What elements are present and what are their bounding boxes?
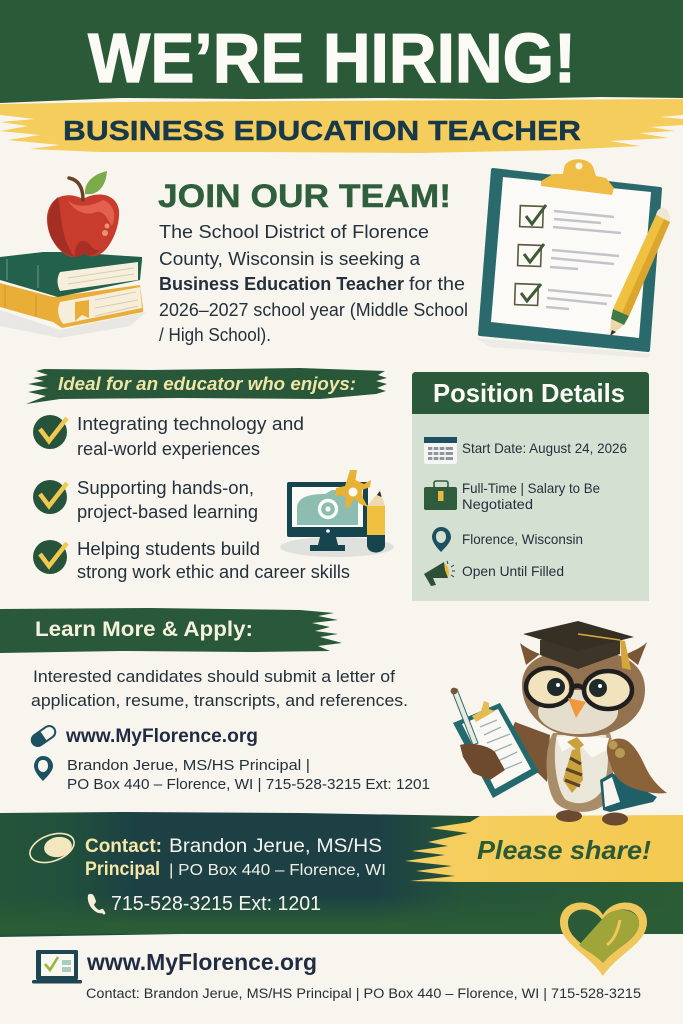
icon: heart	[560, 903, 647, 976]
application instructions: Interested candidates should submit a letter of	[33, 668, 395, 686]
share text: Please share!	[477, 835, 651, 865]
contact name: Brandon Jerue, MS/HS	[169, 836, 382, 857]
shirt collar	[556, 735, 609, 758]
icon: phone	[88, 894, 105, 915]
leaf	[85, 171, 107, 194]
website link: www.MyFlorence.org	[65, 726, 258, 747]
bullet 3: strong work ethic and career skills	[77, 562, 350, 582]
book	[600, 773, 657, 812]
icon: map pin	[34, 756, 53, 781]
icon: briefcase	[424, 481, 457, 510]
face patch	[538, 690, 618, 734]
icon: laptop	[32, 950, 82, 984]
bullet 3	[33, 539, 350, 582]
panel header	[412, 372, 649, 414]
panel: position details	[412, 372, 649, 601]
intro paragraph: The School District of Florence	[159, 221, 429, 242]
clipboard	[453, 701, 539, 798]
application status: Open Until Filled	[462, 563, 564, 579]
subtitle: BUSINESS EDUCATION TEACHER	[63, 115, 581, 146]
title: WE’RE HIRING!	[88, 19, 576, 97]
intro paragraph	[159, 221, 468, 345]
banner text: Learn More & Apply:	[35, 618, 253, 641]
intro paragraph: County, Wisconsin is seeking a	[159, 248, 421, 269]
join our team heading: JOIN OUR TEAM!	[158, 178, 451, 214]
pupils	[547, 678, 565, 696]
pencil	[367, 491, 385, 552]
icon: megaphone	[424, 561, 455, 586]
contact address: Brandon Jerue, MS/HS Principal |	[67, 757, 310, 774]
banner text: Ideal for an educator who enjoys:	[58, 374, 356, 394]
apple	[47, 171, 119, 257]
bullet 1: real-world experiences	[77, 439, 260, 459]
eye whites	[527, 670, 569, 704]
contact address: PO Box 440 – Florence, WI | 715-528-3215 Ext: 1201	[67, 776, 430, 793]
board	[480, 170, 660, 350]
checklist row 3	[515, 284, 612, 309]
head	[522, 650, 645, 737]
clip	[541, 159, 614, 195]
bookmark	[75, 300, 89, 321]
shadow	[476, 338, 650, 358]
beak	[568, 698, 586, 718]
body	[547, 733, 614, 812]
feet	[556, 810, 628, 826]
application instructions	[31, 668, 408, 710]
yellow share brush	[405, 815, 683, 882]
bullet 2	[33, 478, 258, 522]
wing	[607, 738, 667, 793]
checklist row 1	[520, 205, 621, 233]
icon: map pin	[432, 527, 451, 552]
intro paragraph: 2026–2027 school year (Middle School	[159, 299, 468, 320]
location: Florence, Wisconsin	[462, 531, 583, 547]
bullet 1: Integrating technology and	[77, 414, 304, 434]
stem	[69, 178, 83, 200]
monitor	[287, 482, 368, 537]
ears	[520, 642, 647, 665]
shadow	[0, 310, 146, 338]
illustration: clipboard and pencil	[476, 159, 670, 358]
intro paragraph: Business Education Teacher	[159, 273, 404, 294]
start date: Start Date: August 24, 2026	[462, 440, 627, 456]
pencil	[610, 208, 670, 336]
gear	[335, 470, 371, 508]
intro paragraph: / High School).	[159, 324, 271, 345]
yellow book	[0, 283, 143, 328]
green book	[0, 252, 142, 297]
icon: calendar	[424, 437, 457, 464]
contact role and address: | PO Box 440 – Florence, WI	[169, 862, 386, 879]
bullet list	[33, 414, 350, 582]
website footer: www.MyFlorence.org	[86, 949, 317, 975]
employment type: Negotiated	[462, 496, 533, 512]
ideal-for brush banner	[26, 368, 387, 404]
illustration: apple on books	[0, 171, 146, 338]
application instructions: application, resume, transcripts, and references.	[31, 692, 408, 710]
checklist row 2	[518, 244, 619, 269]
illustration: owl mascot	[451, 621, 667, 826]
contact name: Contact:	[85, 836, 162, 857]
glasses	[526, 668, 632, 709]
employment type: Full-Time | Salary to Be	[462, 480, 600, 496]
panel heading: Position Details	[433, 378, 625, 408]
panel body	[412, 410, 649, 601]
subtitle brush banner	[0, 99, 683, 153]
hand	[460, 744, 505, 780]
bullet 1	[33, 414, 304, 459]
bullet 2: Supporting hands-on,	[77, 478, 254, 498]
icon: contact badge	[26, 828, 78, 868]
phone number: 715-528-3215 Ext: 1201	[111, 893, 321, 915]
illustration: computer, gear and pencil	[280, 470, 394, 557]
arm	[494, 722, 550, 782]
contact role and address: Principal	[85, 859, 160, 880]
tie	[563, 737, 584, 793]
footer contact line: Contact: Brandon Jerue, MS/HS Principal | PO Box 440 – Florence, WI | 715-528-3215	[86, 986, 641, 1001]
pencil	[452, 689, 478, 745]
graduation cap	[523, 621, 634, 670]
bullet 2: project-based learning	[77, 502, 258, 522]
learn more brush banner	[0, 608, 342, 653]
bullet 3: Helping students build	[77, 539, 260, 559]
intro paragraph: for the	[409, 273, 465, 294]
header banner	[0, 0, 683, 103]
paper	[491, 177, 651, 338]
icon: link	[28, 722, 59, 750]
contact band	[0, 812, 683, 937]
